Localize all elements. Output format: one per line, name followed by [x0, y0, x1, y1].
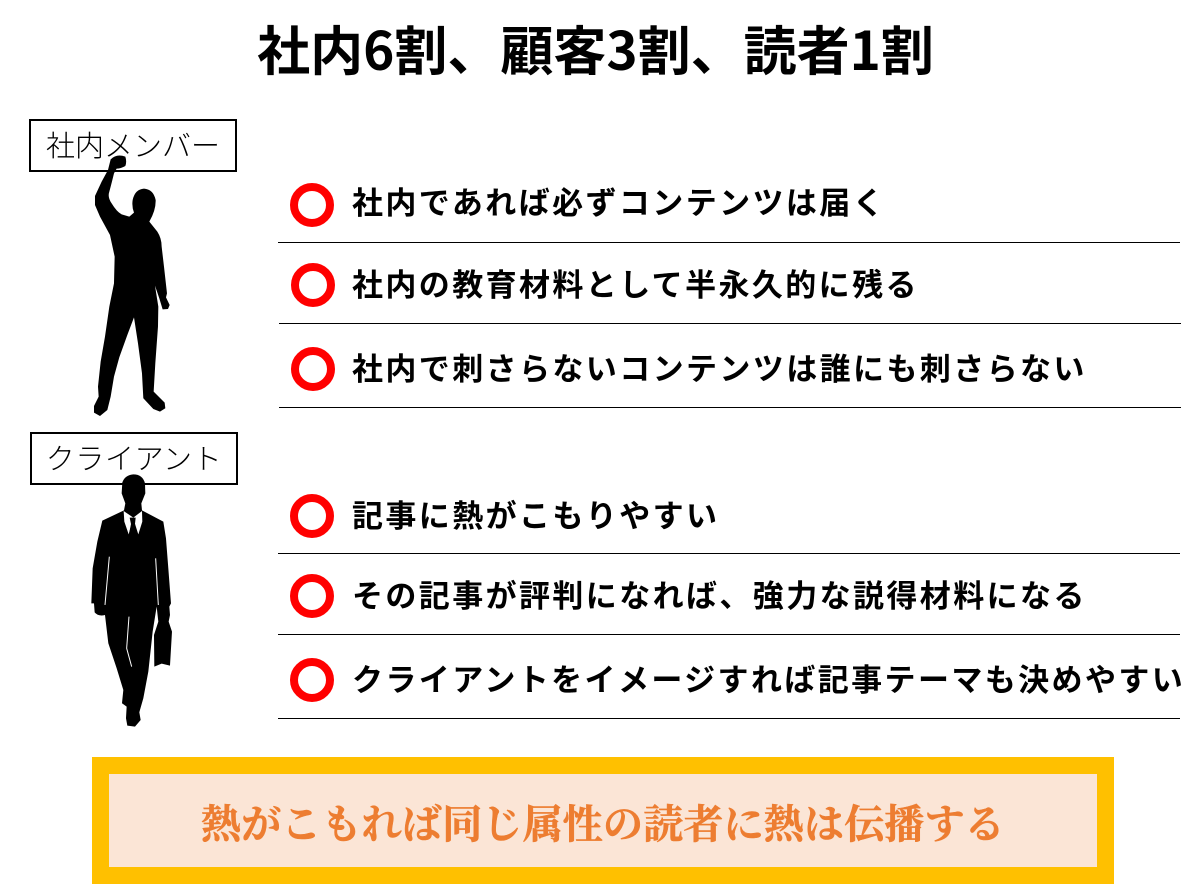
tag: client: クライアント — [46, 436, 222, 478]
text: 社内で刺さらないコンテンツは誰にも刺さらない — [352, 344, 1087, 389]
icon: red circle — [290, 183, 334, 227]
text: 社内であれば必ずコンテンツは届く — [352, 178, 886, 223]
tag: internal members: 社内メンバー — [46, 123, 220, 165]
title: 社内6割、顧客3割、読者1割 — [257, 10, 934, 86]
text: 社内の教育材料として半永久的に残る — [352, 260, 919, 305]
icon: red circle — [290, 658, 334, 702]
text: その記事が評判になれば、強力な説得材料になる — [352, 571, 1087, 616]
tag: internal members — [29, 119, 237, 172]
text: 記事に熱がこもりやすい — [352, 491, 719, 536]
icon: red circle — [291, 347, 335, 391]
tag: client — [30, 432, 238, 485]
icon: red circle — [290, 574, 334, 618]
icon: red circle — [290, 494, 334, 538]
icon: red circle — [291, 263, 335, 307]
text: クライアントをイメージすれば記事テーマも決めやすい — [352, 655, 1185, 700]
conclusion banner — [92, 757, 1114, 884]
conclusion banner: 熱がこもれば同じ属性の読者に熱は伝播する — [201, 793, 1005, 850]
